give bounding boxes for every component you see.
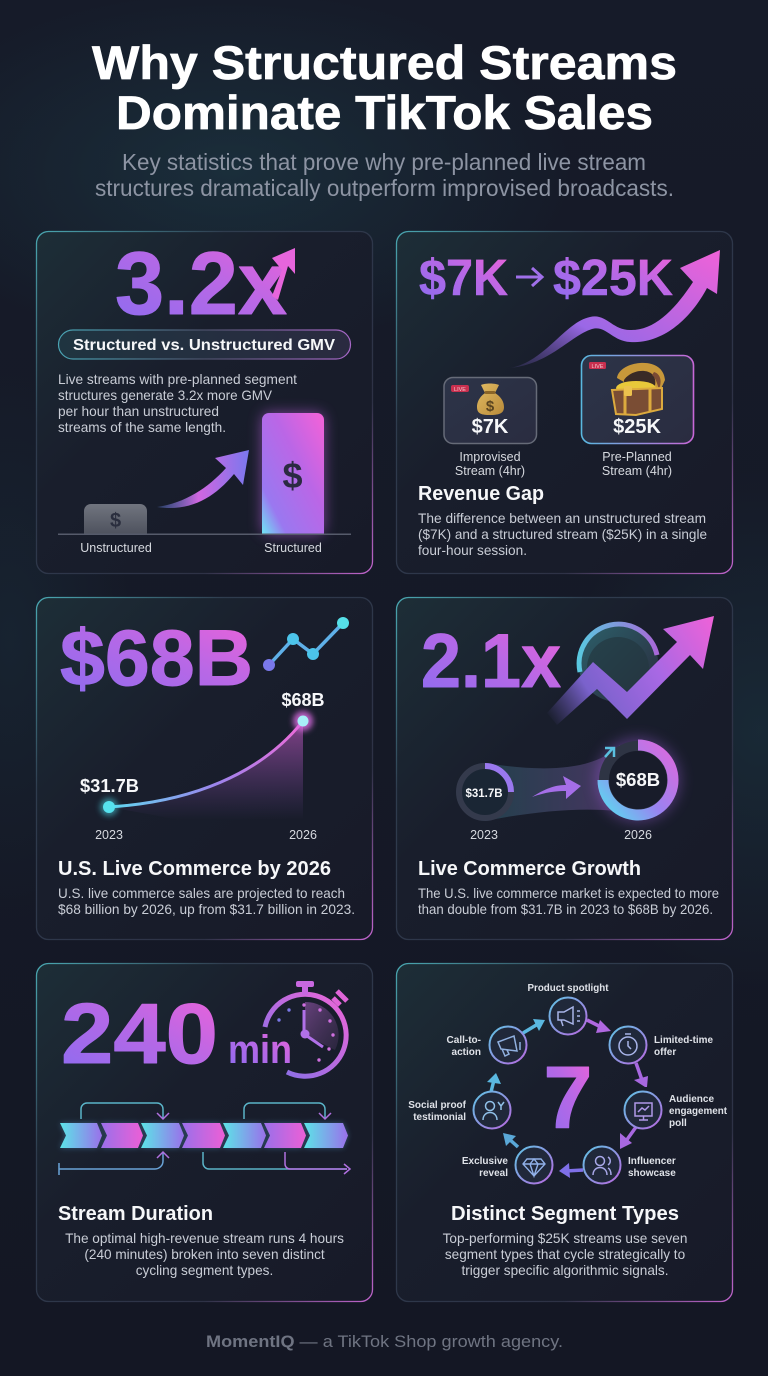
line chart: 2023 xyxy=(95,828,123,842)
segment: call-to-action: Call-to- xyxy=(447,1035,481,1046)
growth comparison xyxy=(459,738,680,842)
description xyxy=(65,1231,344,1278)
stat: 240 min: 240 xyxy=(61,987,218,1082)
icon: treasure chest xyxy=(612,363,665,415)
segment: audience engagement poll: poll xyxy=(669,1118,687,1129)
description: per hour than unstructured xyxy=(58,404,219,419)
stat: $68B: $68B xyxy=(60,613,253,702)
growth comparison: $31.7B xyxy=(465,788,503,800)
segment: exclusive reveal: Exclusive xyxy=(462,1156,508,1167)
icon: money bag: $ xyxy=(486,398,495,415)
card: improvised stream xyxy=(444,378,536,444)
description: trigger specific algorithmic signals. xyxy=(461,1263,669,1278)
card: improvised stream: $7K xyxy=(472,416,509,438)
stat: 2.1x: 2.1x xyxy=(421,619,561,704)
segment: exclusive reveal xyxy=(462,1146,552,1184)
heading: Distinct Segment Types xyxy=(451,1202,679,1225)
title: Dominate TikTok Sales xyxy=(116,86,653,139)
heading: Revenue Gap xyxy=(418,482,544,505)
description: cycling segment types. xyxy=(136,1263,273,1278)
stat: $7K to $25K: $7K xyxy=(419,249,508,306)
panel: structured vs unstructured GMV xyxy=(36,232,372,574)
panel: revenue gap xyxy=(396,232,732,574)
card labels: Pre-Planned xyxy=(602,450,672,464)
pill label: Structured vs. Unstructured GMV xyxy=(73,337,335,354)
segment: call-to-action xyxy=(447,1026,526,1064)
growth comparison: 2023 xyxy=(470,828,498,842)
big number 7: 7 xyxy=(544,1048,592,1147)
subtitle: Key statistics that prove why pre-planned live stream xyxy=(122,149,646,175)
card labels: Stream (4hr) xyxy=(602,464,672,478)
description: $68 billion by 2026, up from $31.7 billion in 2023. xyxy=(58,902,355,917)
description xyxy=(443,1231,687,1278)
segment: influencer showcase: Influencer xyxy=(628,1156,676,1167)
title: Why Structured Streams xyxy=(92,36,677,89)
bar chart xyxy=(58,413,351,555)
icon: coin circle xyxy=(578,622,658,702)
bar chart: $ xyxy=(110,510,121,532)
live badge: LIVE xyxy=(592,364,604,370)
description: (240 minutes) broken into seven distinct xyxy=(84,1247,325,1262)
description xyxy=(418,886,719,917)
cycle arrows xyxy=(59,1103,350,1175)
segment: audience engagement poll: engagement xyxy=(669,1106,728,1117)
arrow: rising swoosh xyxy=(510,250,720,368)
stat: 240 min: min xyxy=(228,1028,292,1072)
description: The optimal high-revenue stream runs 4 hours xyxy=(65,1231,344,1246)
heading: Live Commerce Growth xyxy=(418,857,641,880)
segment timeline xyxy=(60,1123,348,1148)
heading: Stream Duration xyxy=(58,1202,213,1225)
line chart: $68B xyxy=(281,690,325,710)
bar chart: Unstructured xyxy=(80,541,152,555)
bar chart: $ xyxy=(282,455,303,496)
segment: product spotlight xyxy=(528,983,609,1034)
icon: sparkline xyxy=(263,617,349,671)
segment: audience engagement poll xyxy=(624,1092,728,1129)
panel: stream duration xyxy=(36,964,372,1302)
icon: stopwatch xyxy=(265,981,347,1076)
arrow: zigzag growth xyxy=(547,616,714,725)
description xyxy=(418,511,707,558)
segment: limited-time offer xyxy=(610,1026,713,1064)
heading: U.S. Live Commerce by 2026 xyxy=(58,857,331,880)
arrow: growth xyxy=(157,450,249,508)
card labels: Improvised xyxy=(459,450,521,464)
segment: social proof testimonial: testimonial xyxy=(413,1112,466,1123)
subtitle: structures dramatically outperform improvised broadcasts. xyxy=(95,175,674,201)
description: structures generate 3.2x more GMV xyxy=(58,388,272,403)
cycle arrows xyxy=(487,1019,648,1178)
subtitle xyxy=(95,149,674,201)
card: pre-planned stream: $25K xyxy=(613,416,661,438)
segment: product spotlight: Product spotlight xyxy=(528,983,609,994)
line chart: 2026 xyxy=(289,828,317,842)
description xyxy=(58,886,355,917)
stat: 3.2x with arrow: 3.2x xyxy=(115,233,287,333)
segment: influencer showcase: showcase xyxy=(628,1168,676,1179)
segment: exclusive reveal: reveal xyxy=(479,1168,508,1179)
footer: MomentIQ — a TikTok Shop growth agency. xyxy=(206,1332,563,1351)
stat: $7K to $25K xyxy=(419,249,673,306)
segment: social proof testimonial xyxy=(408,1092,510,1128)
bar chart: Structured xyxy=(264,541,322,555)
description: Top-performing $25K streams use seven xyxy=(443,1231,687,1246)
stat: 240 min xyxy=(61,987,292,1082)
live badge: LIVE xyxy=(454,387,466,393)
line chart: $31.7B xyxy=(80,776,139,796)
segment: audience engagement poll: Audience xyxy=(669,1094,714,1105)
panel: distinct segment types xyxy=(396,964,732,1302)
panel: live commerce growth xyxy=(396,598,732,940)
description: Live streams with pre-planned segment xyxy=(58,372,297,387)
description: The U.S. live commerce market is expected to more xyxy=(418,886,719,901)
card labels xyxy=(455,450,672,478)
description: four-hour session. xyxy=(418,543,527,558)
segment: limited-time offer: offer xyxy=(654,1047,676,1058)
description: U.S. live commerce sales are projected to reach xyxy=(58,886,345,901)
card: pre-planned stream xyxy=(582,356,694,444)
description xyxy=(58,372,297,435)
description: streams of the same length. xyxy=(58,420,226,435)
pill label xyxy=(58,330,350,359)
growth comparison: 2026 xyxy=(624,828,652,842)
segment: limited-time offer: Limited-time xyxy=(654,1035,713,1046)
segment: social proof testimonial: Social proof xyxy=(408,1100,467,1111)
card labels: Stream (4hr) xyxy=(455,464,525,478)
description: The difference between an unstructured stream xyxy=(418,511,706,526)
growth comparison: $68B xyxy=(616,769,660,790)
line chart xyxy=(80,690,325,842)
title xyxy=(92,36,677,139)
panel: U.S. live commerce xyxy=(36,598,372,940)
description: than double from $31.7B in 2023 to $68B by 2026. xyxy=(418,902,713,917)
description: ($7K) and a structured stream ($25K) in a single xyxy=(418,527,707,542)
description: segment types that cycle strategically to xyxy=(445,1247,685,1262)
stat: $7K to $25K: $25K xyxy=(553,249,673,306)
segment: influencer showcase xyxy=(584,1146,676,1184)
segment: call-to-action: action xyxy=(452,1047,481,1058)
